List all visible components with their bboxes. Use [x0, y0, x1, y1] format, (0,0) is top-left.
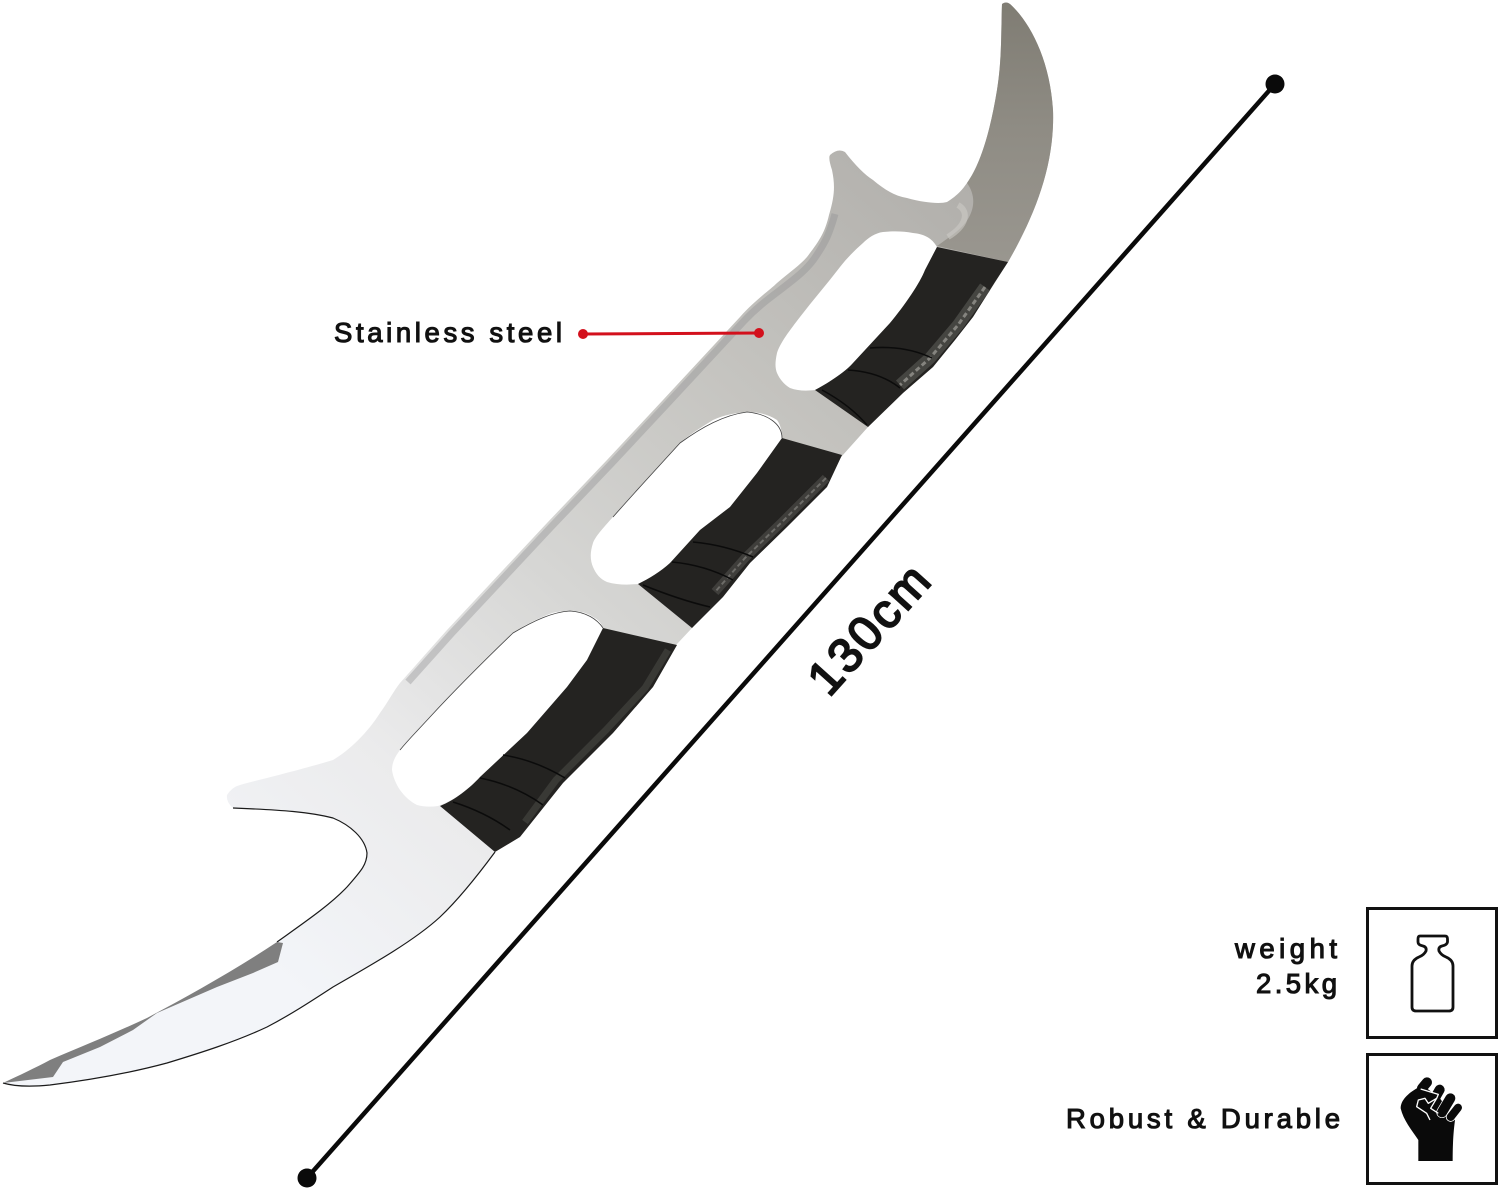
weight label: weight — [1234, 933, 1337, 964]
upper blade darker steel — [937, 2, 1053, 262]
upper edge bevel — [408, 214, 835, 682]
icon: weight — [1368, 908, 1496, 1038]
callout: stainless steel: Stainless steel — [334, 317, 562, 348]
neck bevel highlight — [948, 205, 965, 237]
callout: stainless steel — [334, 317, 764, 348]
blade illustration — [3, 2, 1053, 1086]
steel body with three grip openings — [3, 2, 1053, 1086]
lower tip bevel — [3, 942, 283, 1083]
icon: fist — [1368, 1054, 1496, 1184]
grip 1 — [815, 247, 1008, 427]
durability label: Robust & Durable — [1066, 1103, 1340, 1134]
weight label: 2.5kg — [1256, 968, 1337, 999]
grip 2 — [638, 438, 842, 628]
lower edge contour lines — [3, 808, 495, 1086]
grip 3 — [440, 628, 677, 852]
length label: 130cm — [798, 555, 941, 705]
grip opening contour lines — [400, 412, 782, 750]
weight label — [1234, 933, 1337, 999]
length dimension line — [298, 74, 1284, 1188]
